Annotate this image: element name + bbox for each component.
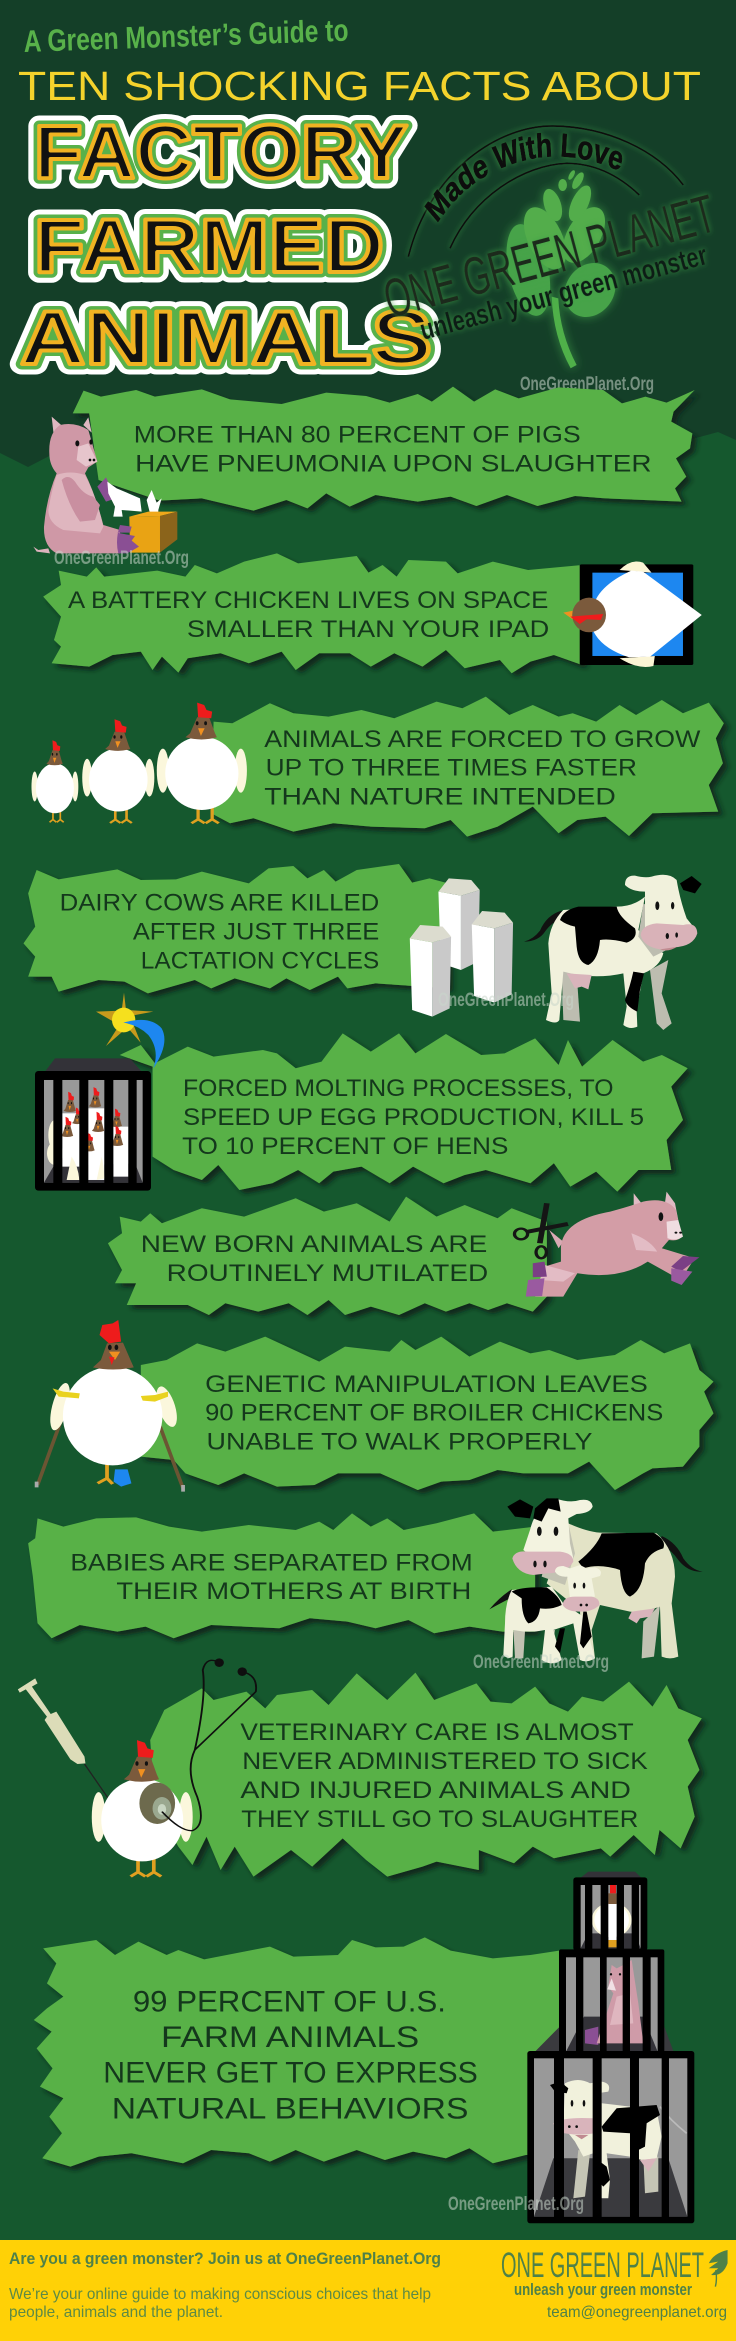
text	[70, 1549, 473, 1605]
text: MORE THAN 80 PERCENT OF PIGS	[134, 421, 581, 448]
text: LACTATION CYCLES	[141, 947, 379, 974]
bubble	[73, 387, 695, 511]
bubble	[23, 864, 448, 993]
text	[134, 421, 652, 477]
text: TO 10 PERCENT OF HENS	[182, 1133, 508, 1160]
icon: milk cartons	[410, 878, 513, 1017]
title: factory farmed animals: ANIMALS	[20, 296, 432, 381]
title: factory farmed animals: FACTORY	[34, 110, 408, 195]
panel: fact 1 pigs pneumonia	[33, 387, 695, 553]
watermark: OneGreenPlanet.Org	[473, 1652, 609, 1673]
icon: pig leaping	[526, 1192, 699, 1297]
text	[264, 726, 701, 810]
text: made with love: Made With Love	[422, 130, 626, 224]
watermark: OneGreenPlanet.Org	[520, 374, 654, 395]
watermark: OneGreenPlanet.Org	[448, 2194, 584, 2215]
text: THAN NATURE INTENDED	[264, 783, 616, 810]
text	[60, 889, 379, 974]
text: AFTER JUST THREE	[133, 918, 379, 945]
icon: three growing hens	[31, 703, 247, 823]
text	[182, 1075, 644, 1160]
panel: fact 5 forced molting	[35, 993, 688, 1192]
panel: fact 2 battery chicken	[43, 553, 702, 673]
icon: pig with tissues	[33, 417, 177, 553]
panel: fact 8 babies separated	[28, 1498, 703, 1663]
icon: footer leaf	[709, 2250, 728, 2287]
icon: hen on crutches	[37, 1320, 183, 1492]
text	[141, 1231, 488, 1287]
title: factory farmed animals: FARMED	[34, 204, 384, 289]
footer email: team@onegreenplanet.org	[547, 2304, 727, 2321]
watermark: OneGreenPlanet.Org	[54, 548, 189, 569]
text: NEVER GET TO EXPRESS	[103, 2056, 478, 2089]
panel: fact 7 genetic manipulation	[37, 1320, 713, 1492]
arcs	[408, 126, 683, 257]
icon: stethoscope	[162, 1659, 256, 1831]
footer description: people, animals and the planet.	[9, 2304, 223, 2321]
panel: fact 3 faster growth	[31, 697, 724, 837]
title: factory farmed animals: FARMED	[34, 204, 384, 289]
icon: cow	[524, 875, 702, 1030]
icon: blue moon	[123, 1020, 164, 1068]
footer headline: Are you a green monster? Join us at OneGreenPlanet.Org	[9, 2249, 441, 2268]
title: factory farmed animals: FARMED	[34, 204, 384, 289]
icon: bottom cage with cow	[527, 2051, 694, 2223]
title: factory farmed animals: FACTORY	[34, 110, 408, 195]
icon: scissors	[514, 1203, 568, 1258]
bubble	[34, 1937, 563, 2167]
text	[240, 1719, 648, 1833]
footer tagline: unleash your green monster	[514, 2280, 692, 2299]
footer description: We’re your online guide to making conscious choices that help	[9, 2286, 431, 2303]
text: UP TO THREE TIMES FASTER	[266, 754, 637, 781]
text: THEIR MOTHERS AT BIRTH	[116, 1578, 471, 1605]
bubble	[120, 1033, 688, 1192]
logo: made with love badge	[378, 122, 722, 371]
text: BABIES ARE SEPARATED FROM	[70, 1549, 473, 1576]
icon: top cage with hen	[573, 1872, 647, 1951]
icon: sun	[96, 993, 153, 1046]
text: NATURAL BEHAVIORS	[112, 2091, 468, 2125]
heading: green monster's guide: A Green Monster’s Guide to	[23, 13, 349, 59]
panel: fact 9 veterinary care	[18, 1659, 702, 1877]
icon: glowing leaf	[499, 169, 626, 368]
bubble	[28, 1513, 535, 1638]
bubble	[141, 1337, 713, 1490]
panel: footer	[0, 2240, 736, 2341]
heading: ten shocking facts about: TEN SHOCKING FACTS ABOUT	[18, 63, 701, 109]
bubble	[150, 1673, 702, 1877]
title: factory farmed animals: FACTORY	[34, 110, 408, 195]
watermark: OneGreenPlanet.Org	[438, 990, 574, 1011]
panel: fact 6 new born mutilated	[108, 1192, 699, 1315]
text: FARM ANIMALS	[161, 2020, 419, 2054]
text	[68, 587, 549, 643]
title: factory farmed animals: ANIMALS	[20, 296, 432, 381]
title: factory farmed animals: ANIMALS	[20, 296, 432, 381]
panel: fact 4 dairy cows	[23, 864, 702, 1030]
text: UNABLE TO WALK PROPERLY	[207, 1428, 592, 1455]
text: ROUTINELY MUTILATED	[167, 1260, 488, 1287]
panel: fact 10 natural behaviors	[34, 1872, 694, 2223]
icon: calf	[489, 1565, 601, 1663]
bubble	[43, 553, 582, 673]
bubble	[108, 1197, 547, 1315]
icon: mother cow	[507, 1498, 703, 1659]
text: DAIRY COWS ARE KILLED	[60, 889, 379, 916]
icon: chicken on ipad	[563, 561, 702, 667]
text: 99 PERCENT OF U.S.	[133, 1985, 446, 2018]
text	[205, 1371, 663, 1455]
text	[103, 1985, 478, 2125]
footer background	[0, 2240, 736, 2341]
text: VETERINARY CARE IS ALMOST	[240, 1719, 634, 1746]
footer description	[9, 2286, 431, 2321]
title: factory farmed animals	[20, 110, 432, 381]
icon: caged hens	[35, 1058, 151, 1191]
icon: middle cage with pig	[534, 1949, 674, 2053]
bubble	[211, 697, 724, 837]
text: SMALLER THAN YOUR IPAD	[187, 616, 549, 643]
icon: syringe	[18, 1678, 109, 1799]
text: AND INJURED ANIMALS AND	[240, 1777, 631, 1804]
icon: hen patient	[92, 1740, 193, 1876]
text: A BATTERY CHICKEN LIVES ON SPACE	[68, 587, 548, 614]
text: NEW BORN ANIMALS ARE	[141, 1231, 487, 1258]
